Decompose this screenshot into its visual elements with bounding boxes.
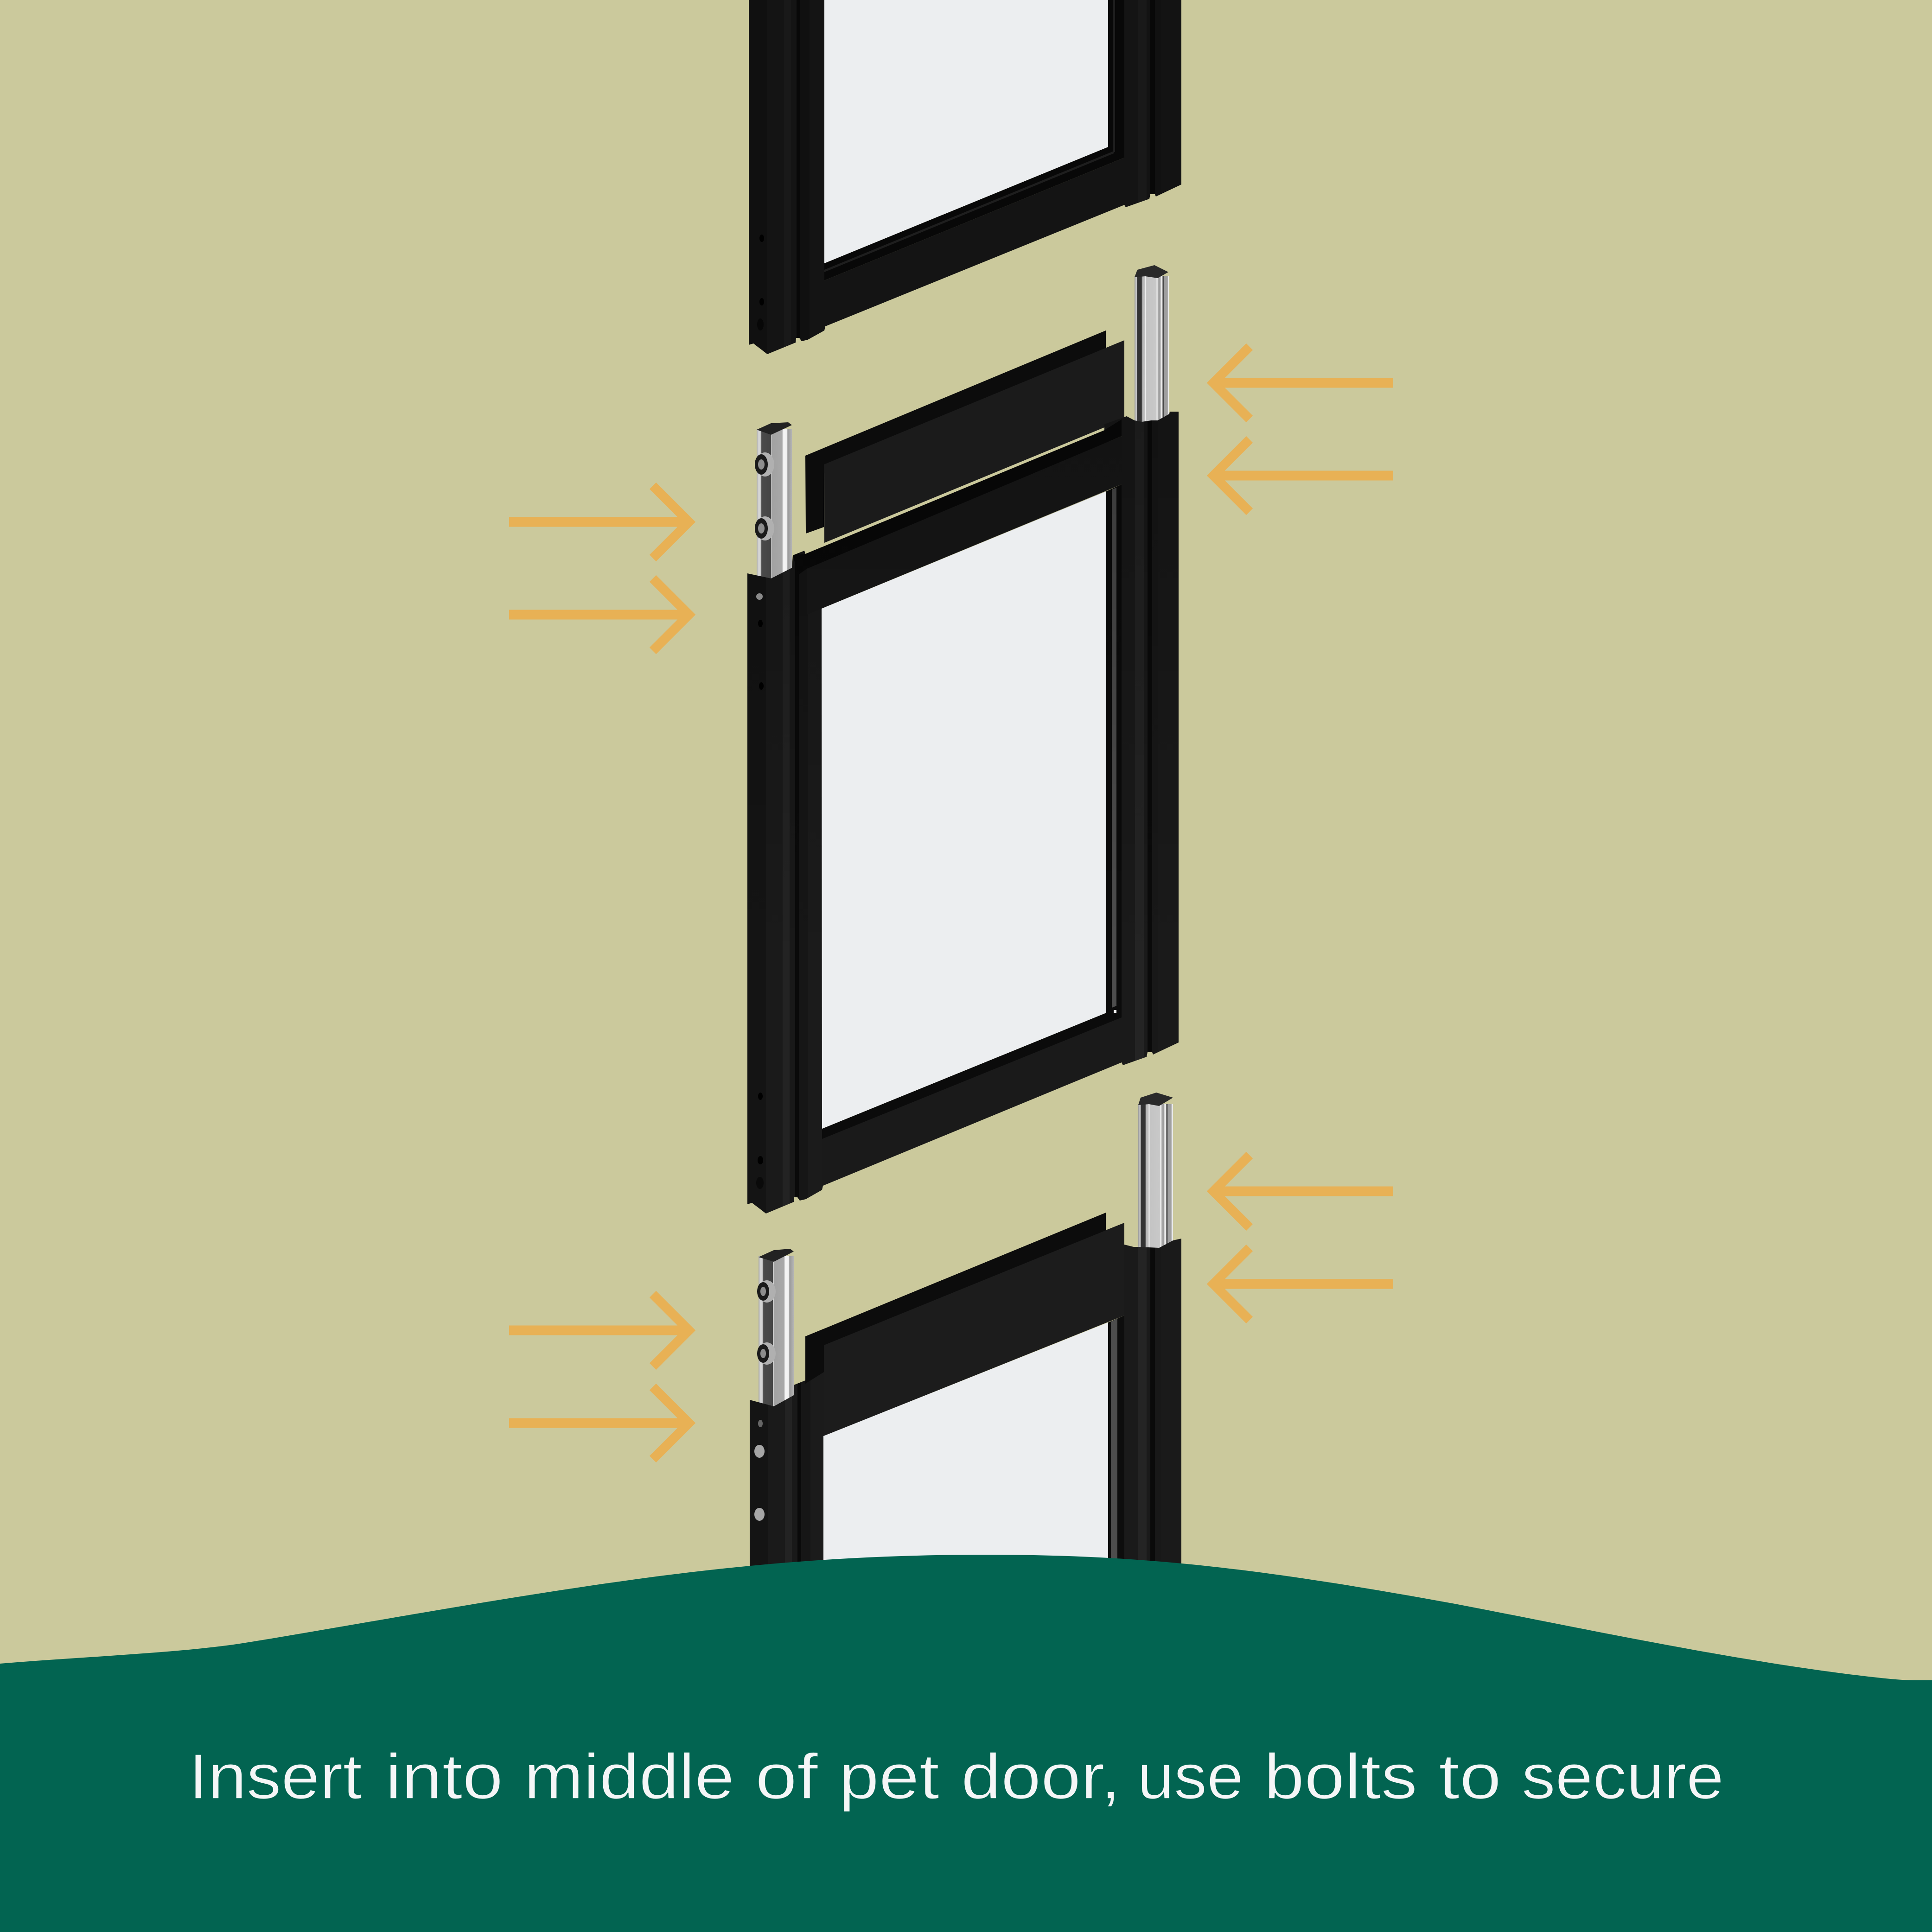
caption: secure [1522,1741,1724,1812]
top door frame section [749,0,1181,371]
caption [189,1741,1724,1812]
bolt, upper [755,452,774,477]
right connector tube, upper [1135,265,1169,422]
bolt, lower [757,1342,776,1365]
top section side holes [757,235,764,330]
bolt, upper [757,1280,776,1303]
right connector tube, lower [1138,1093,1173,1248]
middle section side holes [756,593,764,1189]
left connector tube with bolts, lower [757,1249,794,1407]
bottom door frame section [750,1213,1181,1566]
arrow: upper right pair [1213,347,1393,512]
caption: middle [524,1741,734,1812]
caption: bolts [1264,1741,1417,1812]
caption: door, [961,1741,1121,1812]
caption: use [1137,1741,1243,1812]
caption: of [755,1741,818,1812]
bottom section glass panel [823,1322,1108,1560]
caption: to [1439,1741,1501,1812]
caption: into [385,1741,503,1812]
left connector tube with bolts, upper [755,422,792,579]
bottom section screws [754,1420,765,1521]
arrow: upper left pair [509,486,689,651]
caption: Insert [189,1741,362,1812]
arrow: lower right pair [1213,1155,1393,1320]
caption: pet [839,1741,939,1812]
bolt, lower [755,516,774,540]
filler rail insert, middle [805,330,1124,543]
green wave footer [0,1555,1932,1932]
middle door frame section [747,408,1179,1224]
top section glass panel [824,0,1108,263]
middle section glass panel [822,491,1106,1129]
arrow: lower left pair [509,1294,689,1459]
